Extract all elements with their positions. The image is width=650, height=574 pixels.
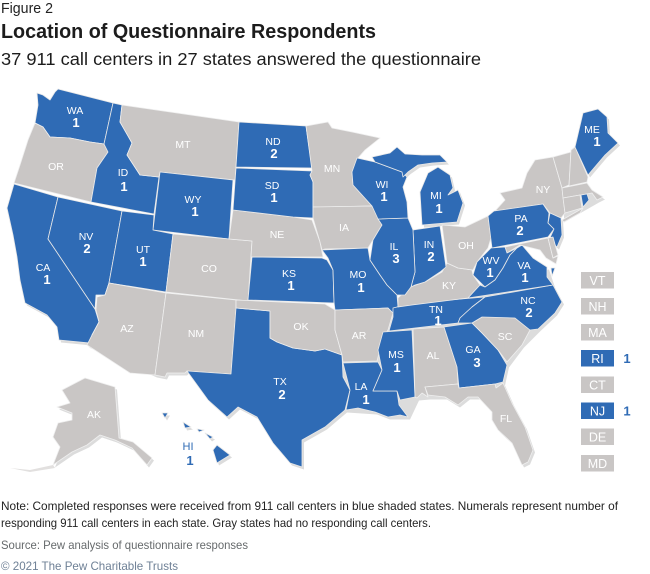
state: Kansas (248, 257, 334, 303)
state: Georgia (444, 323, 507, 388)
legend row: VT (581, 272, 614, 288)
state: Maine: 1 (593, 134, 601, 149)
state: Connecticut (563, 195, 582, 213)
state: Washington: 1 (72, 115, 80, 130)
state: South Dakota (233, 168, 313, 218)
source: Source: Pew analysis of questionnaire responses (1, 538, 248, 552)
state: Washington (35, 89, 113, 144)
state: Illinois: IL (390, 241, 399, 253)
state: Arizona: AZ (120, 323, 134, 335)
state: South Carolina (472, 317, 530, 362)
state: Idaho (91, 103, 159, 214)
state: Wisconsin: 1 (380, 189, 388, 204)
state: West Virginia: WV (483, 255, 499, 267)
legend row: MD: MD (588, 457, 607, 471)
state: Maryland (505, 238, 558, 264)
state: Kansas: 1 (287, 278, 295, 293)
title: Location of Questionnaire Respondents (1, 21, 376, 43)
state: Washington: WA (67, 105, 83, 117)
state: Nebraska: NE (270, 229, 284, 241)
state: Utah: UT (136, 244, 151, 256)
state: New Mexico (155, 293, 236, 377)
state: North Dakota (236, 122, 312, 168)
state: Virginia: 1 (521, 270, 529, 285)
state: Maine: ME (584, 124, 600, 136)
state: Georgia: 3 (473, 355, 481, 370)
state: Virginia (468, 245, 555, 298)
state: California: CA (36, 262, 50, 274)
state: New Mexico: NM (188, 328, 204, 340)
state: North Carolina (458, 285, 562, 330)
state: Idaho: ID (118, 167, 129, 179)
legend: small northeastern states (581, 272, 631, 472)
state: Alabama (413, 327, 458, 398)
state: West Virginia (473, 247, 517, 287)
state: Indiana (411, 226, 446, 287)
state: Louisiana: 1 (362, 392, 370, 407)
state: Iowa (313, 206, 382, 250)
state: Alaska: AK (87, 409, 101, 421)
legend row: VT: VT (590, 274, 606, 288)
legend row: NJ: NJ (590, 404, 605, 418)
copyright: © 2021 The Pew Charitable Trusts (1, 559, 178, 573)
state: Wyoming: WY (185, 194, 201, 206)
state: Virginia: VA (517, 260, 531, 272)
state: Tennessee: TN (429, 304, 443, 316)
state: Florida (425, 383, 533, 465)
state: South Dakota: SD (265, 180, 280, 192)
state: New York: NY (536, 184, 550, 196)
state: Nebraska (229, 210, 323, 257)
legend row: RI (581, 350, 631, 366)
state: Tennessee (389, 297, 485, 331)
state: West Virginia: 1 (486, 265, 494, 280)
state: Iowa: IA (339, 222, 349, 234)
state: North Carolina: 2 (525, 305, 533, 320)
coastline shadow (9, 112, 620, 470)
legend row: CT (581, 376, 614, 393)
state: California: 1 (43, 272, 51, 287)
state: Louisiana (343, 362, 408, 417)
state: Maine (575, 109, 618, 175)
state: Utah (109, 211, 173, 292)
state: Utah: 1 (139, 254, 147, 269)
state: South Carolina: SC (498, 331, 513, 343)
state: Wisconsin: WI (376, 179, 388, 191)
state: Pennsylvania: PA (514, 213, 528, 225)
state: Idaho: 1 (120, 179, 128, 194)
state: Texas: 2 (278, 387, 286, 402)
figure number: Figure 2 (1, 1, 53, 17)
state: Delaware (548, 237, 558, 258)
legend row: RI: RI (591, 352, 604, 366)
legend row: DE (581, 428, 614, 445)
legend row: NJ (581, 402, 631, 419)
state: Hawaii: HI (182, 441, 194, 453)
state: Oklahoma: OK (293, 321, 309, 333)
note (1, 499, 619, 530)
state: Oklahoma (236, 300, 342, 355)
legend row: RI: 1 (623, 351, 631, 366)
state: Alabama: AL (427, 350, 440, 362)
legend row: DE: DE (589, 430, 606, 444)
state: Mississippi: MS (388, 349, 404, 361)
state: Pennsylvania (488, 204, 554, 248)
state: Vermont (553, 152, 571, 188)
state: Michigan: MI (430, 190, 442, 202)
state: Missouri: 1 (357, 280, 365, 295)
state: Indiana: 2 (427, 249, 435, 264)
state: Florida: FL (500, 413, 512, 425)
state: California (7, 184, 99, 343)
state: Illinois (370, 218, 415, 295)
legend row: CT: CT (589, 378, 606, 392)
state: Ohio: OH (458, 240, 474, 252)
state: Michigan (372, 147, 463, 225)
legend row: MA (581, 324, 614, 340)
state: Pennsylvania: 2 (516, 223, 524, 238)
state: Hawaii (162, 413, 230, 468)
state: Colorado: CO (201, 263, 217, 275)
legend row: NH (581, 298, 614, 314)
state: Arkansas (335, 308, 393, 362)
state: Nevada (48, 197, 122, 309)
state: Texas (187, 308, 350, 467)
state: Minnesota (306, 122, 380, 207)
legend row: NJ: 1 (623, 404, 631, 418)
state: Wyoming: 1 (191, 204, 199, 219)
state: Indiana: IN (424, 239, 434, 251)
state: Wyoming (153, 172, 233, 239)
state: Nevada: NV (79, 231, 93, 243)
state: Arizona (87, 283, 166, 375)
state: Nevada: 2 (83, 241, 91, 256)
map of states (7, 89, 618, 472)
state: Colorado (166, 234, 252, 301)
state: Kansas: KS (282, 268, 296, 280)
state: Alaska (10, 378, 152, 472)
note: Note: Completed responses were received from 911 call centers in blue shaded states. Numerals represent number of (1, 499, 619, 513)
state: New Jersey (548, 213, 562, 247)
state: New Hampshire (569, 147, 588, 186)
state: Wisconsin (352, 158, 408, 219)
legend row: MA: MA (588, 326, 608, 340)
state: Rhode Island (581, 194, 589, 207)
state: Ohio (442, 216, 491, 270)
state: Montana (120, 105, 239, 180)
state: Massachusetts (562, 183, 603, 200)
state: Louisiana: LA (355, 381, 367, 393)
state: Texas: TX (273, 376, 287, 388)
state: Illinois: 3 (392, 251, 400, 266)
state: Kentucky (398, 263, 480, 307)
state: Montana: MT (175, 139, 191, 151)
state: South Dakota: 1 (270, 190, 278, 205)
state: Missouri: MO (350, 269, 366, 281)
state: Minnesota: MN (324, 163, 340, 175)
legend row: NH: NH (588, 300, 607, 314)
subtitle: 37 911 call centers in 27 states answered the questionnaire (1, 49, 481, 69)
state: Kentucky: KY (442, 280, 456, 292)
state: Mississippi: 1 (393, 360, 401, 375)
state: Arkansas: AR (352, 330, 367, 342)
state: Mississippi (373, 330, 415, 400)
state: North Carolina: NC (520, 295, 536, 307)
note: responding 911 call centers in each state. Gray states had no responding call centers. (1, 516, 431, 530)
state: Oregon (14, 123, 108, 202)
state: North Dakota: ND (265, 136, 281, 148)
state: Michigan: 1 (435, 201, 443, 216)
state: Hawaii: 1 (186, 453, 194, 468)
state: Oregon: OR (48, 161, 64, 173)
state: Missouri (322, 248, 398, 314)
state: North Dakota: 2 (270, 146, 278, 161)
state: Georgia: GA (465, 344, 481, 356)
state: New York (495, 157, 583, 222)
legend row: MD (581, 455, 614, 472)
state: Tennessee: 1 (434, 313, 442, 328)
